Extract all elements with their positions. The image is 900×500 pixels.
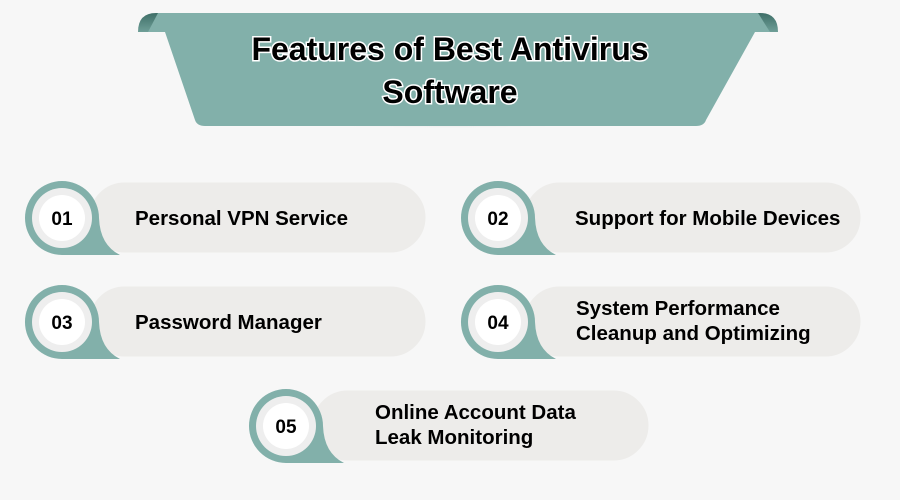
item 05: Online Account Data — [375, 401, 576, 424]
item 04 — [461, 285, 862, 359]
item 02: 02 — [487, 209, 509, 230]
item 05: 05 — [275, 417, 297, 438]
title — [251, 31, 649, 110]
item 04: System Performance — [576, 297, 780, 320]
item 05: Leak Monitoring — [375, 426, 533, 449]
item 03: Password Manager — [135, 311, 322, 334]
item 02 — [461, 181, 862, 255]
title: Features of Best Antivirus — [251, 31, 649, 67]
item 05 — [249, 389, 650, 463]
item 04: Cleanup and Optimizing — [576, 322, 811, 345]
item 01: 01 — [51, 209, 73, 230]
item 04: 04 — [487, 313, 509, 334]
title: Software — [382, 74, 518, 110]
item 02: Support for Mobile Devices — [575, 207, 840, 230]
item 03: 03 — [51, 313, 73, 334]
item 01 — [25, 181, 427, 255]
banner: title ribbon — [138, 13, 778, 150]
item 03 — [25, 285, 427, 359]
item 01: Personal VPN Service — [135, 207, 348, 230]
